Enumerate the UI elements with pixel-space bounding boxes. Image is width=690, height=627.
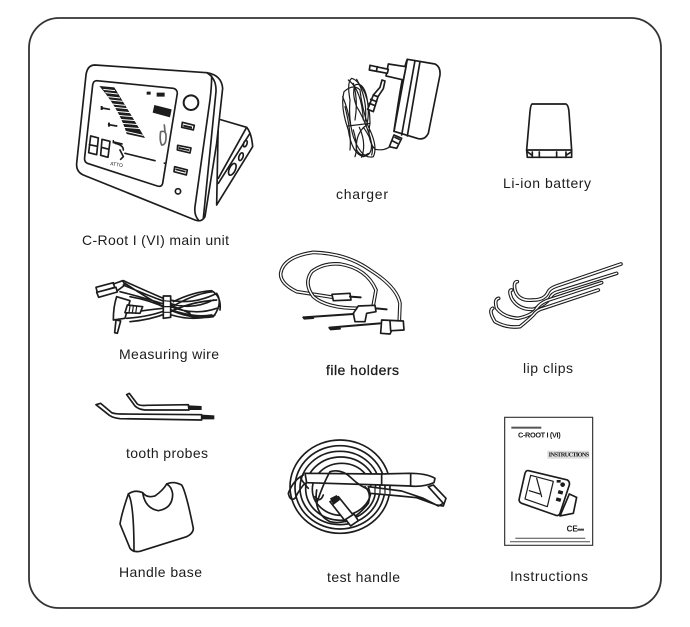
label: test handle: test handle	[327, 569, 400, 585]
icon: file holders	[281, 252, 404, 334]
label: Li-ion battery: Li-ion battery	[503, 175, 591, 191]
label: measuring wire: Measuring wire	[119, 346, 219, 362]
icon: instructions booklet: CE	[567, 524, 578, 533]
label: tooth probes: tooth probes	[126, 445, 208, 461]
icon: main unit: ATTO	[110, 161, 123, 169]
icon: instructions booklet: INSTRUCTIONS	[549, 452, 590, 459]
icon: lip clips	[491, 264, 621, 327]
icon: Li-ion battery	[527, 104, 572, 157]
icon: tooth probes	[96, 393, 214, 420]
icon: test handle	[288, 440, 446, 533]
label: handle base: Handle base	[119, 564, 202, 580]
icon: main unit	[77, 65, 253, 221]
label: charger: charger	[336, 186, 388, 202]
icon: handle base	[120, 483, 193, 552]
icon: instructions booklet: C-ROOT I (VI)	[518, 431, 561, 440]
icon: instructions booklet	[505, 417, 593, 545]
label: main unit: C-Root I (VI) main unit	[82, 232, 229, 248]
label: file holders: file holders	[326, 362, 399, 378]
label: lip clips: lip clips	[523, 360, 573, 376]
icon: measuring wire	[96, 281, 220, 333]
label: instructions: Instructions	[510, 568, 588, 584]
icon: charger	[343, 59, 440, 157]
